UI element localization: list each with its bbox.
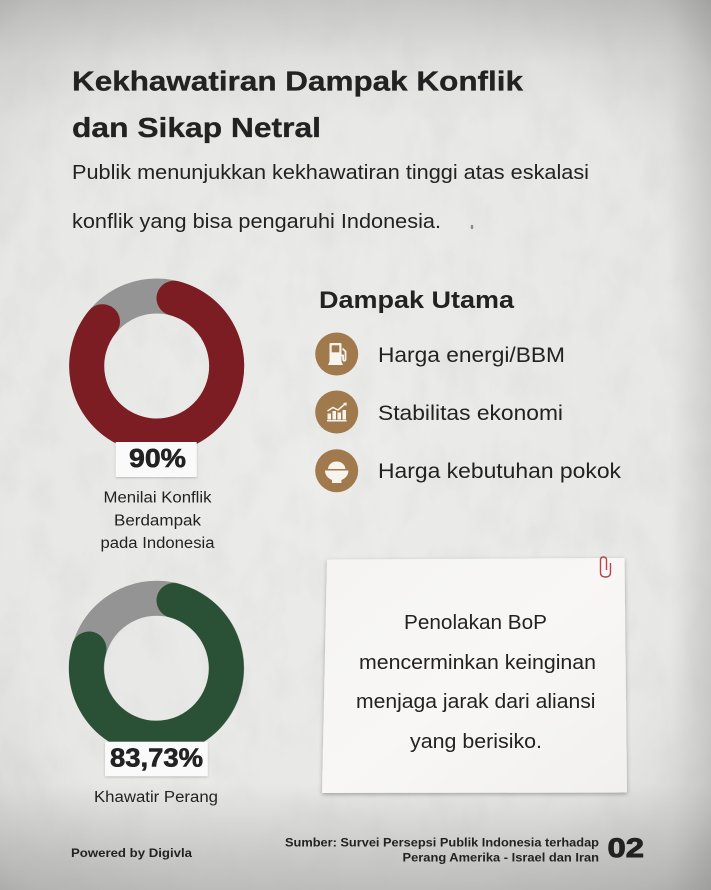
footer: credit: Powered by Digivla [71,846,192,860]
icon: paper clip [600,557,610,577]
caption: 90%: pada Indonesia [100,535,215,552]
subtitle [72,161,589,233]
value label: 83,73%: 83,73% [110,743,203,773]
donut chart: 83,73% [86,598,227,776]
footer: source: Sumber: Survei Persepsi Publik Indonesia terhadap [285,836,599,850]
note text: Penolakan BoP [404,612,547,634]
callout note [322,557,627,793]
donut chart: 90% [87,296,227,477]
subtitle: konflik yang bisa pengaruhi Indonesia. [72,210,441,233]
list item: energy: Harga energi/BBM [378,344,565,367]
value label: 90% [116,442,197,477]
footer: source: Perang Amerika - Israel dan Iran [402,850,599,864]
note text: yang berisiko. [410,731,542,753]
heading: Dampak Utama: Dampak Utama [319,287,515,314]
caption: 90%: Menilai Konflik [104,490,212,506]
list item: economy [315,390,563,434]
subtitle: Publik menunjukkan kekhawatiran tinggi atas eskalasi [72,161,589,184]
list item: economy: Stabilitas ekonomi [378,402,563,425]
caption: 90% [100,490,215,552]
list item: energy [315,332,565,376]
icon: fuel pump [315,332,358,376]
paper [322,558,627,793]
title: dan Sikap Netral [72,112,321,143]
caption: 83,73%: Khawatir Perang [94,789,218,806]
list item: staples: Harga kebutuhan pokok [378,460,622,483]
value label: 90%: 90% [129,443,186,473]
list item: staples [315,449,622,492]
page number: 02 [608,833,644,863]
title: Kekhawatiran Dampak Konflik [72,66,523,96]
note text: menjaga jarak dari aliansi [356,691,596,713]
icon: chart [315,390,358,434]
icon: rice bowl [315,449,358,492]
footer: source [285,836,599,864]
caption: 90%: Berdampak [114,512,201,530]
title [72,66,523,143]
note text: mencerminkan keinginan [359,652,596,674]
note text [356,612,596,753]
